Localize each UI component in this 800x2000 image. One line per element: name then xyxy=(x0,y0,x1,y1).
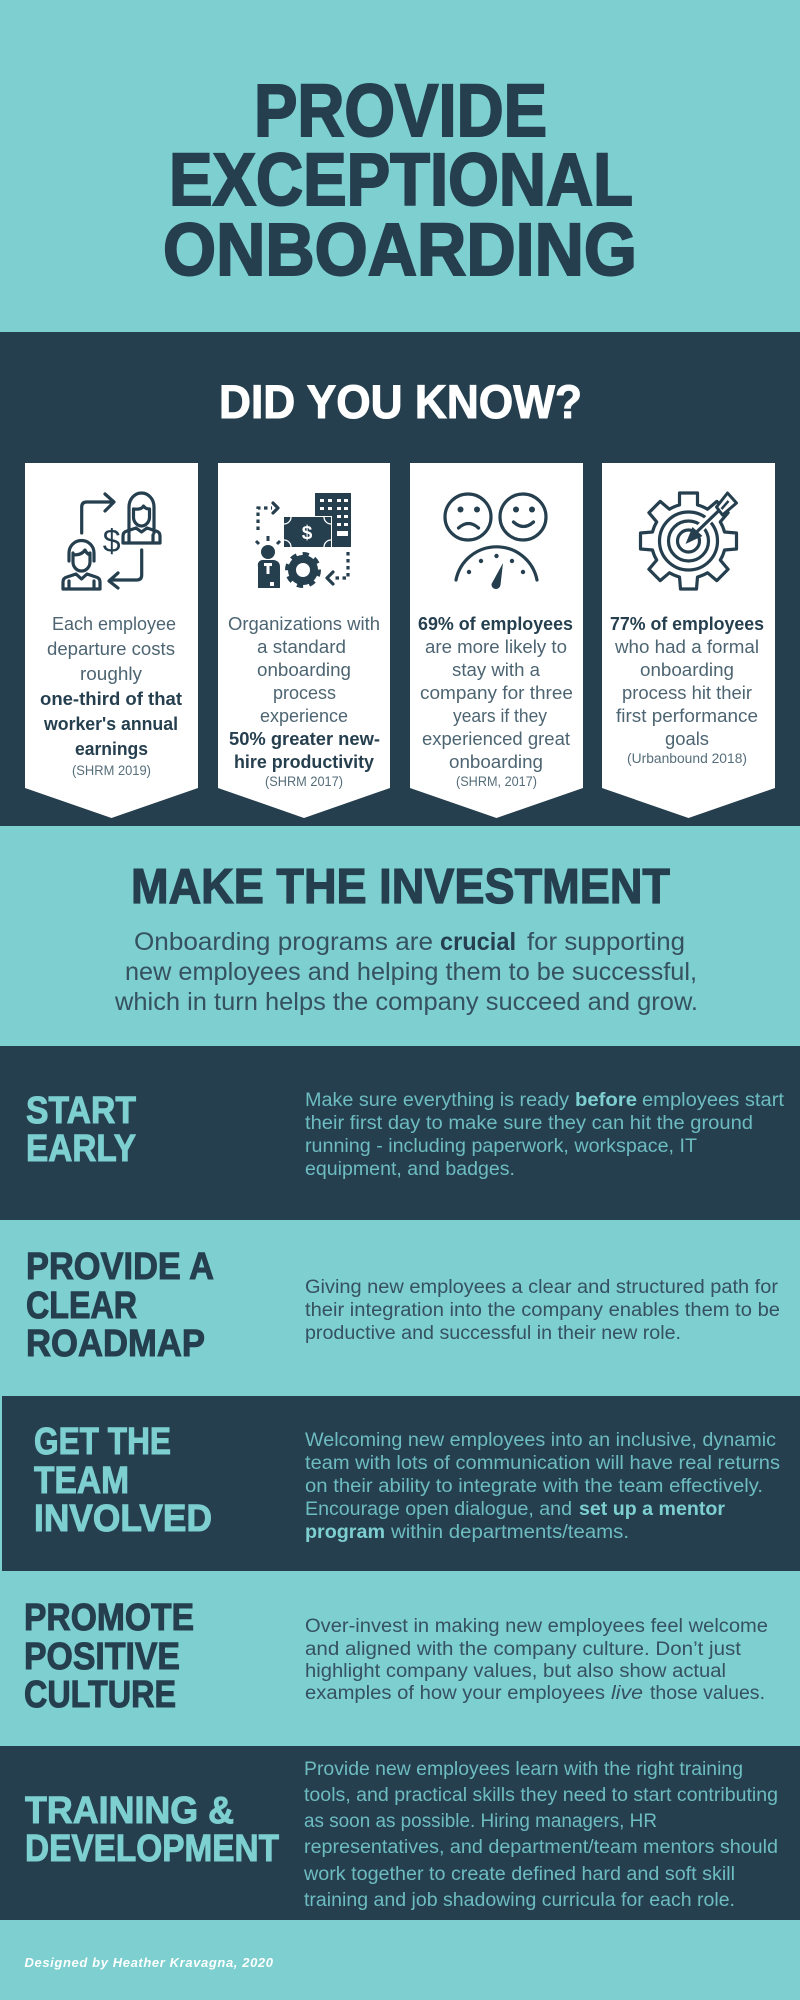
text: team xyxy=(305,1430,780,1543)
card text: hire productivity xyxy=(234,752,374,772)
card text: goals xyxy=(665,729,709,749)
text: roadmap: productive and successful in their new role. xyxy=(305,1323,681,1344)
card text: (SHRM, 2017) xyxy=(456,773,537,789)
card text: process hit their xyxy=(622,683,752,703)
panel: provide a clear roadmap xyxy=(0,1220,800,1396)
panel: start early xyxy=(0,1046,800,1220)
card text: (SHRM 2017) xyxy=(265,773,343,789)
panel: did you know xyxy=(0,332,800,826)
card text: are more likely to xyxy=(425,637,567,657)
text: team: Encourage open dialogue, and xyxy=(305,1499,572,1520)
card text: 77% of employees xyxy=(610,614,764,634)
title: PROVIDE xyxy=(254,69,547,152)
card text: departure costs xyxy=(47,639,175,659)
text: culture: live xyxy=(611,1683,643,1704)
heading: promote positive culture: POSITIVE xyxy=(24,1636,180,1678)
text: training: as soon as possible. Hiring managers, HR xyxy=(304,1811,657,1832)
text: start early: running - including paperwork, workspace, IT xyxy=(305,1136,697,1157)
heading: get the team involved: GET THE xyxy=(34,1421,171,1463)
text: team: program xyxy=(305,1522,385,1543)
panel: get the team involved xyxy=(2,1396,800,1571)
text: culture: and aligned with the company culture. Don’t just xyxy=(305,1639,742,1660)
text: culture: highlight company values, but also show actual xyxy=(305,1661,726,1682)
card text xyxy=(610,614,764,766)
text block: investment intro: new employees and helping them to be successful, xyxy=(125,958,697,986)
heading: training and development: DEVELOPMENT xyxy=(25,1828,279,1870)
card text: onboarding xyxy=(257,660,351,680)
card text xyxy=(418,614,573,789)
text block: investment intro: crucial xyxy=(440,928,516,956)
text: culture: those values. xyxy=(650,1683,765,1704)
heading: get the team involved: TEAM xyxy=(34,1460,129,1502)
panel: training and development xyxy=(0,1746,800,1920)
text: start early: Make sure everything is ready xyxy=(305,1090,570,1111)
heading: promote positive culture: CULTURE xyxy=(24,1674,176,1716)
heading: promote positive culture: PROMOTE xyxy=(24,1597,194,1639)
icon: building, money, person, gear: $ xyxy=(302,523,313,544)
text: training: Provide new employees learn with the right training xyxy=(304,1759,743,1780)
icon: gear with target and arrow xyxy=(640,493,736,589)
text: team: team with lots of communication will have real returns xyxy=(305,1453,780,1474)
text: start early: their first day to make sure they can hit the ground xyxy=(305,1113,753,1134)
card text: (Urbanbound 2018) xyxy=(627,750,747,766)
footer credit: Designed by Heather Kravagna, 2020 xyxy=(24,1955,274,1970)
heading: start early: EARLY xyxy=(26,1128,136,1170)
heading: training and development: TRAINING & xyxy=(25,1790,234,1832)
text: roadmap: their integration into the company enables them to be xyxy=(305,1300,780,1321)
card text: experience xyxy=(260,706,348,726)
text: start early: before xyxy=(575,1090,637,1111)
text: culture: examples of how your employees xyxy=(305,1683,605,1704)
title xyxy=(163,69,637,291)
card text: years if they xyxy=(453,706,547,726)
text: culture xyxy=(305,1616,768,1704)
card text xyxy=(40,614,182,778)
card text xyxy=(228,614,380,789)
card text: onboarding xyxy=(640,660,734,680)
text block: investment intro: which in turn helps the company succeed and grow. xyxy=(114,988,698,1016)
icon: employee exchange with dollar xyxy=(63,493,160,589)
heading: make the investment: MAKE THE INVESTMENT xyxy=(131,860,670,914)
card text: Organizations with xyxy=(228,614,380,634)
card text: 69% of employees xyxy=(418,614,573,634)
text: team: within departments/teams. xyxy=(390,1522,629,1543)
heading: promote positive culture xyxy=(24,1597,194,1716)
heading: provide a clear roadmap: PROVIDE A xyxy=(26,1246,214,1288)
text: start early xyxy=(305,1090,785,1180)
card text: roughly xyxy=(80,664,142,684)
heading: get the team involved: INVOLVED xyxy=(34,1498,212,1540)
card text: stay with a xyxy=(452,660,541,680)
card text: experienced great xyxy=(422,729,570,749)
heading: training and development xyxy=(25,1790,279,1870)
card text: Each employee xyxy=(52,614,176,634)
card text: (SHRM 2019) xyxy=(72,762,151,778)
heading: start early xyxy=(26,1090,136,1170)
card text: earnings xyxy=(75,739,148,759)
card text: onboarding xyxy=(449,752,543,772)
card: performance goals xyxy=(602,463,775,818)
card text: 50% greater new- xyxy=(229,729,380,749)
card text: company for three xyxy=(420,683,573,703)
text block: investment intro: Onboarding programs are xyxy=(134,928,433,956)
card: retention xyxy=(410,463,583,818)
heading: start early: START xyxy=(26,1090,136,1132)
card text: first performance xyxy=(616,706,758,726)
card: departure cost xyxy=(25,463,198,818)
text: training: tools, and practical skills they need to start contributing xyxy=(304,1785,778,1806)
text block: investment intro xyxy=(114,928,698,1016)
text: start early: equipment, and badges. xyxy=(305,1159,515,1180)
text: culture: Over-invest in making new employees feel welcome xyxy=(305,1616,768,1637)
icon: building, money, person, gear xyxy=(256,493,351,588)
text: team: set up a mentor xyxy=(579,1499,726,1520)
icon: faces and gauge xyxy=(445,494,546,589)
panel: promote positive culture xyxy=(0,1571,800,1746)
card text: process xyxy=(273,683,336,703)
heading: provide a clear roadmap xyxy=(26,1246,214,1365)
text: training: work together to create defined hard and soft skill xyxy=(303,1864,735,1885)
card text: worker's annual xyxy=(43,714,178,734)
card text: a standard xyxy=(257,637,346,657)
title: EXCEPTIONAL xyxy=(169,138,633,221)
text: training: representatives, and department/team mentors should xyxy=(304,1837,778,1858)
text block: investment intro: for supporting xyxy=(527,928,685,956)
card: productivity xyxy=(218,463,390,818)
text: start early: employees start xyxy=(642,1090,785,1111)
text: roadmap xyxy=(305,1277,780,1344)
card text: one-third of that xyxy=(40,689,182,709)
text: team: Welcoming new employees into an inclusive, dynamic xyxy=(305,1430,776,1451)
text: training: training and job shadowing curricula for each role. xyxy=(304,1890,735,1911)
text: training xyxy=(303,1759,778,1911)
text: roadmap: Giving new employees a clear and structured path for xyxy=(305,1277,779,1298)
title: ONBOARDING xyxy=(163,208,637,291)
card text: who had a formal xyxy=(614,637,759,657)
heading: provide a clear roadmap: CLEAR xyxy=(26,1285,137,1327)
text: team: on their ability to integrate with the team effectively. xyxy=(305,1476,763,1497)
heading: get the team involved xyxy=(34,1421,212,1540)
heading: did you know: DID YOU KNOW? xyxy=(219,375,582,428)
heading: provide a clear roadmap: ROADMAP xyxy=(26,1323,205,1365)
icon: employee exchange with dollar: $ xyxy=(103,523,121,559)
